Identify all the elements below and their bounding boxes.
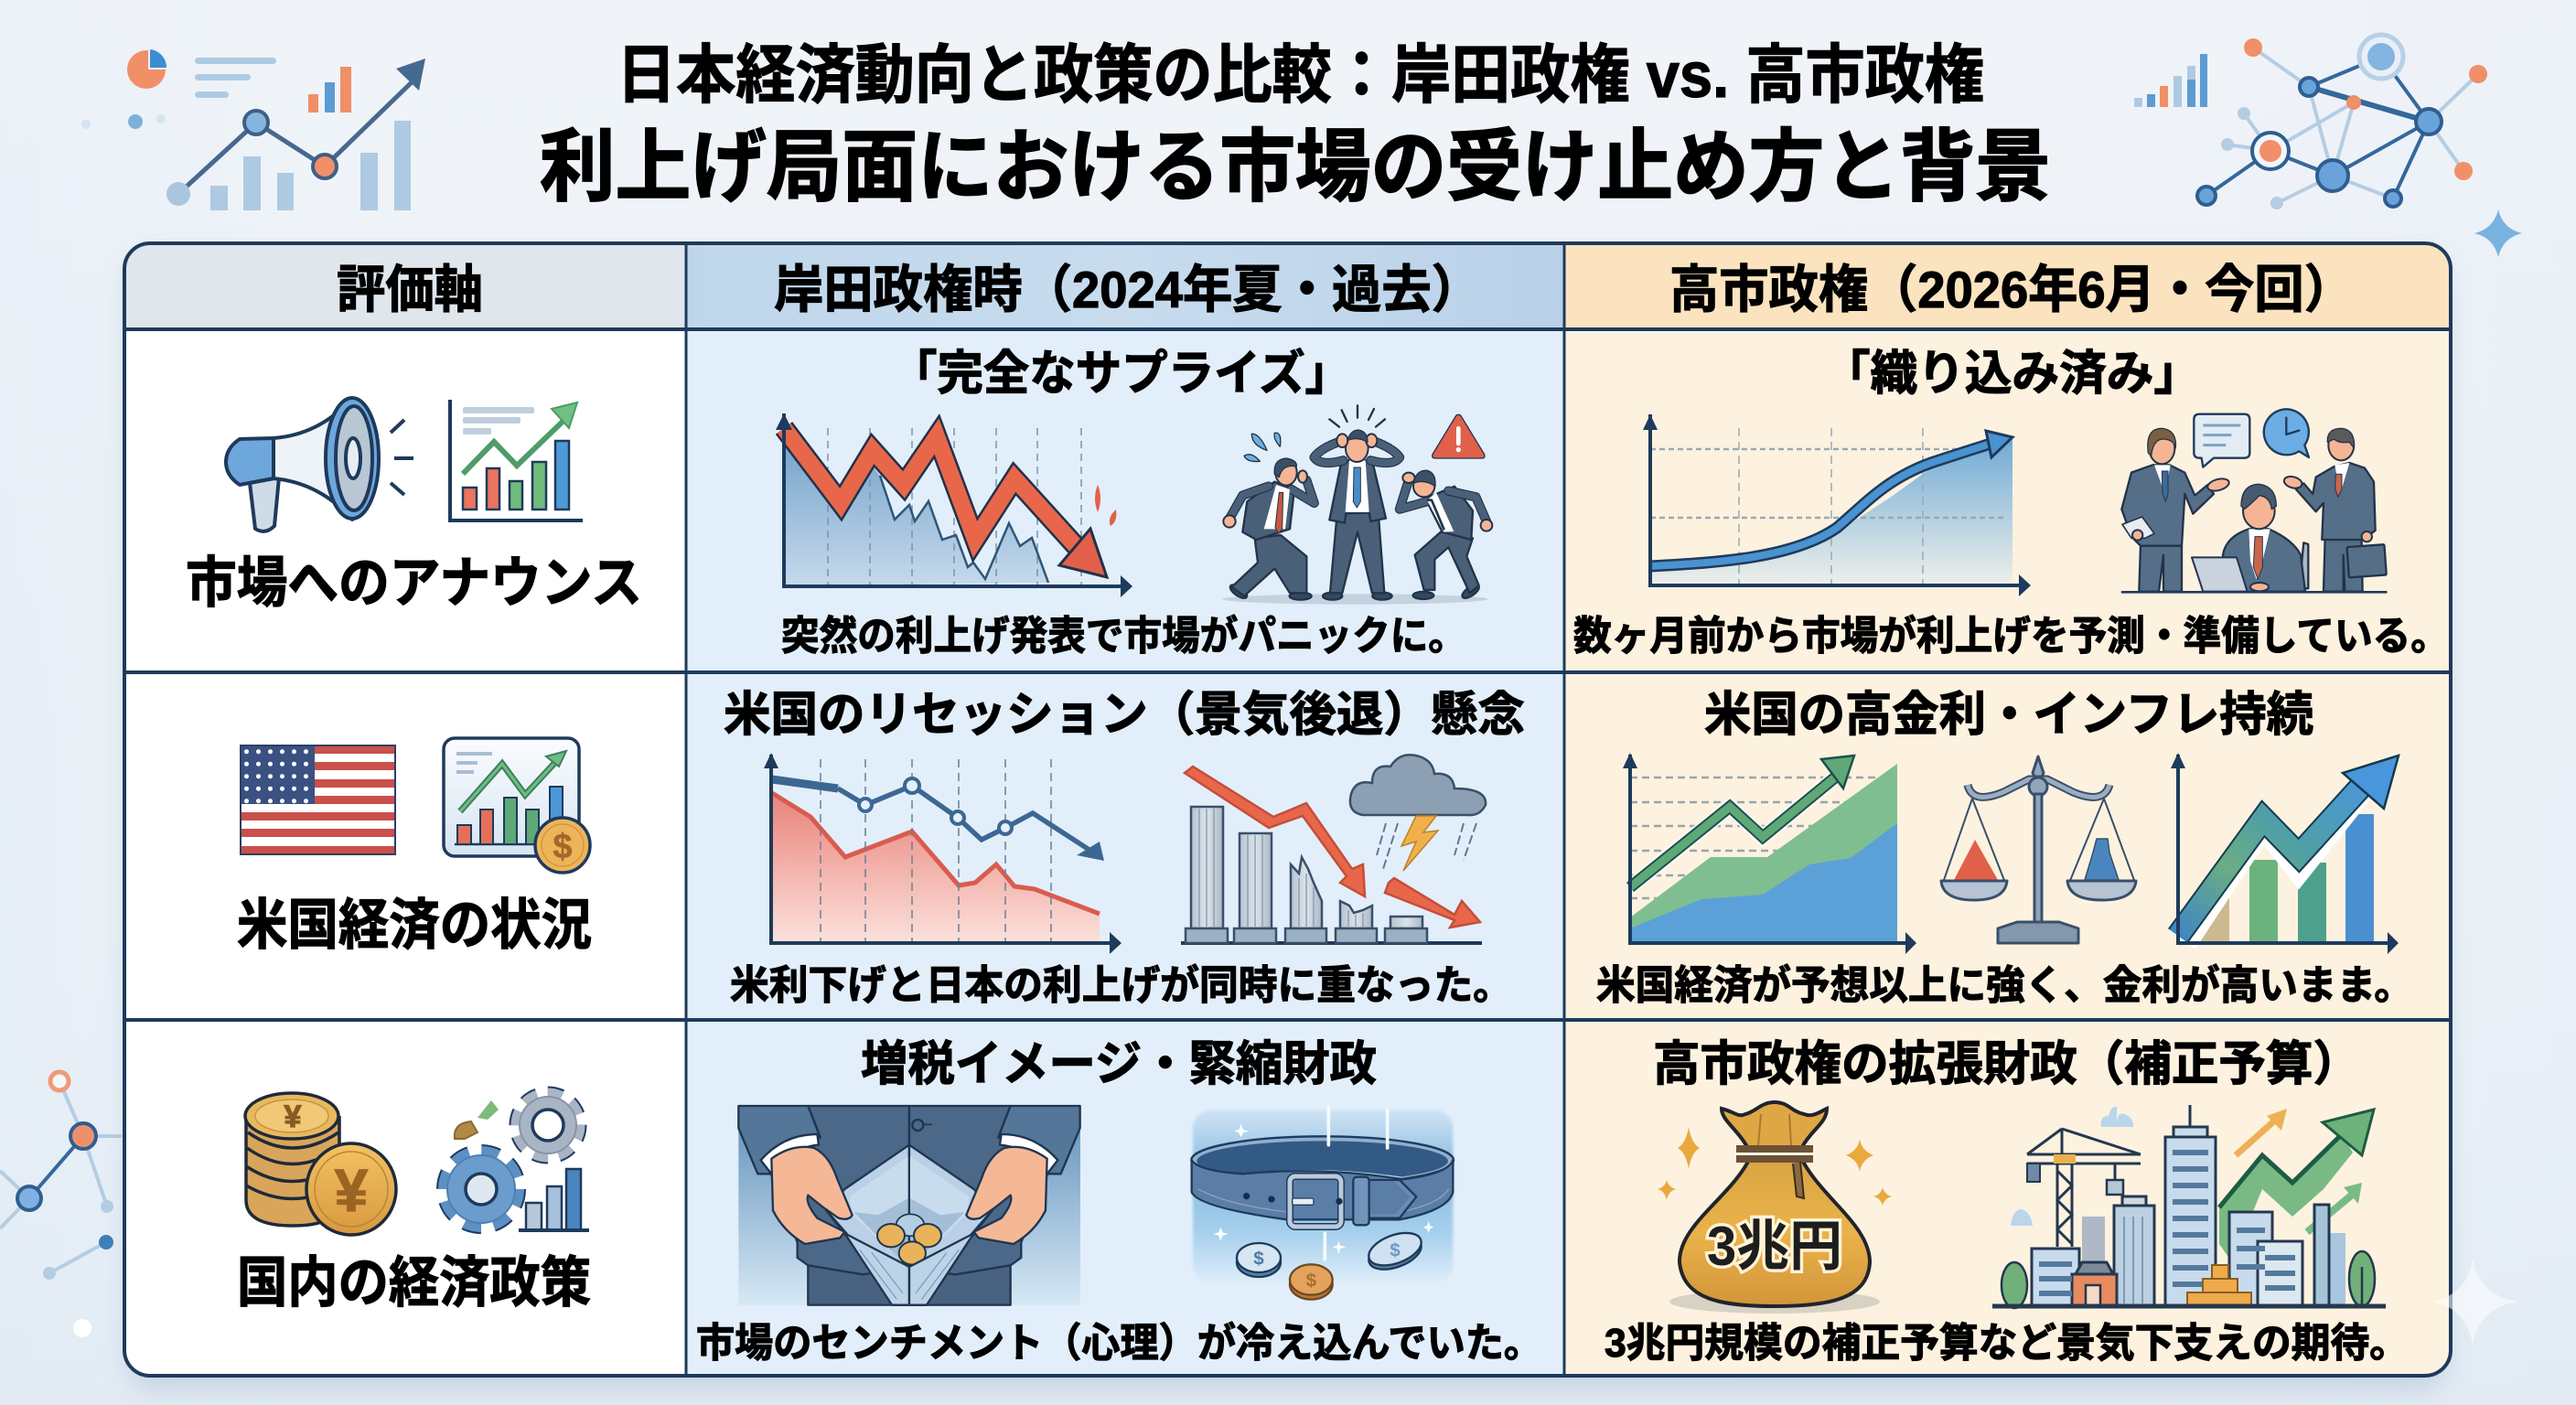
icon: yen coins bbox=[245, 1093, 396, 1235]
caption: row 2 Kishida: 米利下げと日本の利上げが同時に重なった。 bbox=[730, 963, 1512, 1008]
caption: row 1 Takaichi: 数ヶ月前から市場が利上げを予測・準備している。 bbox=[1573, 614, 2449, 659]
icon: chart card with dollar coin bbox=[444, 738, 590, 873]
row label: 国内の経済政策: 国内の経済政策 bbox=[237, 1252, 591, 1314]
illustration: tightened belt: $ bbox=[1306, 1271, 1317, 1292]
heading: 完全なサプライズ: 「完全なサプライズ」 bbox=[891, 348, 1351, 401]
icon: rising chart bbox=[450, 400, 583, 520]
caption: row 3 Takaichi: 3兆円規模の補正予算など景気下支えの期待。 bbox=[1605, 1321, 2409, 1366]
illustration: tightened belt: $ bbox=[1253, 1249, 1264, 1270]
heading: 増税イメージ・緊縮財政: 増税イメージ・緊縮財政 bbox=[861, 1038, 1377, 1091]
chart: rising bars and arrow bbox=[2171, 753, 2399, 954]
chart: falling US line and area bbox=[764, 753, 1122, 954]
heading: 米国のリセッション懸念: 米国のリセッション（景気後退）懸念 bbox=[724, 689, 1525, 742]
icon: money bag 3兆円: 3兆円 bbox=[1707, 1216, 1842, 1277]
icon: calm businessmen bbox=[2121, 409, 2387, 592]
icon: collapsing pillars and storm bbox=[1181, 755, 1486, 943]
header: 評価軸: 評価軸 bbox=[337, 261, 483, 318]
chart: anticipated rise bbox=[1643, 414, 2031, 596]
title: 利上げ局面における市場の受け止め方と背景 bbox=[540, 123, 2051, 211]
label: yen symbols: ¥ bbox=[335, 1156, 369, 1224]
row label: 米国経済の状況: 米国経済の状況 bbox=[237, 895, 592, 956]
illustration: tightened belt: $ bbox=[1390, 1239, 1401, 1260]
icon: panicking businessmen bbox=[1223, 405, 1492, 605]
row label: 市場へのアナウンス: 市場へのアナウンス bbox=[186, 552, 642, 614]
icon: chart card with dollar coin: $ bbox=[553, 828, 573, 866]
heading: 織り込み済み: 「織り込み済み」 bbox=[1823, 348, 2201, 401]
icon: network decoration top right bbox=[2134, 35, 2487, 209]
icon: megaphone bbox=[226, 398, 413, 531]
illustration: tightened belt bbox=[1191, 1107, 1454, 1300]
icon: balance scale bbox=[1941, 756, 2136, 943]
panel: comparison table bbox=[124, 243, 2451, 1376]
header: 岸田政権時: 岸田政権時（2024年夏・過去） bbox=[774, 261, 1481, 318]
caption: row 2 Takaichi: 米国経済が予想以上に強く、金利が高いまま。 bbox=[1596, 963, 2413, 1008]
icon: network decoration bottom left bbox=[0, 1072, 122, 1337]
label: yen symbols: ¥ bbox=[284, 1099, 302, 1134]
chart: market crash bbox=[776, 413, 1132, 597]
icon: city and rising arrows bbox=[1992, 1105, 2386, 1308]
caption: row 3 Kishida: 市場のセンチメント（心理）が冷え込んでいた。 bbox=[696, 1321, 1542, 1366]
table shadow bbox=[128, 256, 2447, 1390]
icon: growth chart decoration top left bbox=[81, 48, 425, 210]
heading: 高市政権の拡張財政: 高市政権の拡張財政（補正予算） bbox=[1653, 1038, 2360, 1091]
illustration: empty pockets bbox=[738, 1106, 1080, 1305]
icon: US flag bbox=[241, 745, 395, 854]
icon: faint white sparkle bottom right bbox=[2432, 1258, 2517, 1346]
icon: money bag 3兆円 bbox=[1658, 1102, 1892, 1314]
label: yen symbols bbox=[284, 1099, 369, 1224]
icon: sparkle top right bbox=[2474, 209, 2522, 257]
header: 高市政権: 高市政権（2026年6月・今回） bbox=[1669, 261, 2354, 318]
title bbox=[540, 39, 2051, 211]
icon: gears and bars bbox=[443, 1092, 589, 1230]
title: 日本経済動向と政策の比較：岸田政権 vs. 高市政権 bbox=[617, 39, 1984, 111]
heading: 米国の高金利・インフレ持続: 米国の高金利・インフレ持続 bbox=[1704, 689, 2313, 742]
caption: row 1 Kishida: 突然の利上げ発表で市場がパニックに。 bbox=[781, 614, 1466, 659]
chart: rising areas bbox=[1623, 753, 1916, 954]
